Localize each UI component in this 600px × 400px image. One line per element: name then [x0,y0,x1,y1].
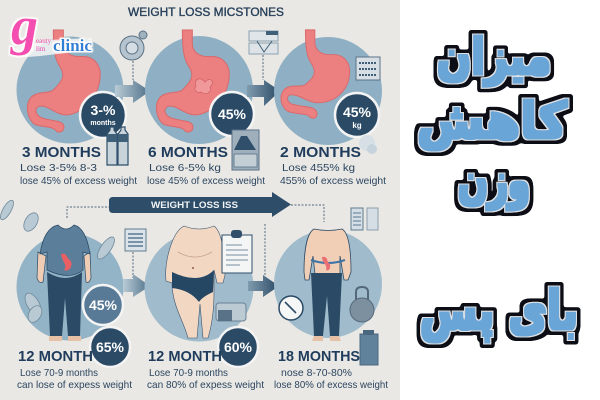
icon: figure in briefs [166,226,225,338]
text block [147,162,265,187]
banner arrow: weight loss [67,192,324,222]
text block: Lose 70-9 months [149,367,228,379]
badge: 65% [90,327,130,367]
heading: 6 MONTHS [148,144,228,161]
badge: 3-% months [80,92,126,138]
icon: clock [279,296,303,320]
icon: pill pack [356,57,380,80]
badge: 45% kg [335,93,379,137]
badge: 60%: 60% [224,339,253,355]
text block: lose 45% of excess weight [147,175,265,187]
text block [17,367,132,391]
text block: 455% of excess weight [280,175,386,187]
text block: lose 45% of excess weight [20,175,137,187]
icon: weight lock [350,287,374,322]
icon: stomach [156,30,229,132]
badge: 60% [218,327,258,367]
arrow [248,275,279,297]
icon: bottles [107,127,128,165]
heading: 2 MONTHS [280,144,361,161]
arrow [115,80,150,103]
icon: document [125,229,146,278]
icon: slim figure [304,229,351,341]
logo: beauty slim clinic: clinic [53,36,92,55]
text block: Lose 70-9 months [20,367,98,379]
icon: stomach [27,30,100,132]
badge: 45% kg: 45% [343,104,372,120]
logo: beauty slim clinic [10,0,92,58]
heading: 12 MONTH [148,348,222,365]
badge: 45% [210,92,254,136]
arrow [247,80,280,106]
icon: figure in shirt [37,225,91,341]
icon: water glass [359,135,377,154]
panel: 12 months, underwear figure [144,226,264,391]
icon: stomach [281,30,350,118]
title: وزن: وزن [458,152,530,211]
icon: clipboard device [249,31,278,80]
text block: can 80% of expess weight [147,379,264,391]
icon: clipboard [222,230,252,273]
text block [280,162,386,187]
text block: Lose 6-5% kg [149,162,221,174]
icon: heart mark [195,79,213,94]
icon: dna ribbon [0,198,118,325]
text block: lose 80% of excess weight [274,379,388,391]
panel: 6 months [145,30,265,187]
logo: beauty slim clinic: lim [36,45,46,53]
text block: Lose 3-5% 8-3 [20,162,97,174]
title: میزان: میزان [437,28,551,87]
icon: band device [120,31,147,80]
panel: 18 months [274,208,388,391]
panel: 2 months [274,30,386,187]
text block [147,367,264,391]
text block: nose 8-70-80% [281,367,352,379]
badge: 45%: 45% [218,106,247,122]
text block [274,367,388,391]
icon: dotted connector [264,224,266,275]
banner arrow: weight loss: WEIGHT LOSS ISS [151,200,238,210]
heading: 3 MONTHS [22,144,101,161]
text block: can lose of expess weight [17,379,132,391]
text block [20,162,137,187]
icon: kit [216,303,246,321]
arrow [123,274,150,297]
icon: scale device [232,130,259,170]
badge: 3-% months: months [90,120,116,127]
badge: 3-% months: 3-% [91,102,116,118]
logo: beauty slim clinic: eauty [36,37,52,45]
text block: Lose 455% kg [282,162,355,174]
badge: 45% [83,285,123,325]
panel: infographic background [0,0,400,400]
heading: 18 MONTHS [278,348,360,365]
badge: 65%: 65% [96,339,125,355]
panel: 3 months [16,30,137,187]
title: کاهش: کاهش [417,92,568,150]
heading: 12 MONTH [18,348,93,365]
icon: documents [351,208,378,230]
badge: 45% kg: kg [352,121,362,130]
badge: 45%: 45% [89,297,118,313]
icon: supplement tub [360,330,378,365]
panel: 12 months, clothed figure [16,225,132,391]
title: WEIGHT LOSS MICSTONES [128,7,284,19]
